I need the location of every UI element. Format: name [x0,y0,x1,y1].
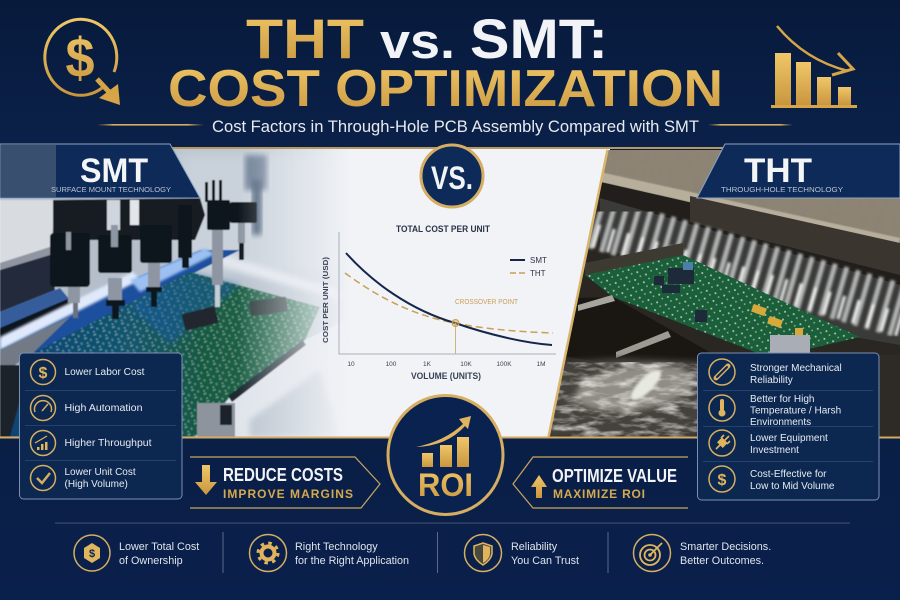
SMT label tab [0,144,200,198]
text: lower equipment investment: Lower Equipment [750,433,828,444]
legend: THT [530,269,546,278]
subtitle: Cost Factors in Through-Hole PCB Assembly Compared with SMT [212,117,699,136]
text: better for high temperature: Temperature / Harsh [750,406,841,416]
center white chart background [0,148,610,438]
footer item: smarter decisions: Better Outcomes. [680,555,764,567]
chart axes [339,232,556,354]
icon: chain link [709,359,735,385]
x tick labels: 10 [347,361,355,368]
THT label tab: THROUGH-HOLE TECHNOLOGY [721,187,843,194]
x tick labels: 1K [423,361,432,368]
footer item: right technology: Right Technology [295,541,378,553]
THT curve [345,273,553,333]
text: lower unit cost: (High Volume) [64,479,128,490]
green through-hole board [585,243,683,276]
title: COST OPTIMIZATION [168,60,723,118]
icon: dollar: $ [718,472,727,489]
title: THT [246,7,364,70]
footer item: reliability: You Can Trust [511,555,579,567]
footer item: total cost: Lower Total Cost [119,541,199,553]
VS badge: VS. [431,160,473,196]
callout: reduce costs [190,457,380,508]
text: lower labor cost: Lower Labor Cost [64,367,145,378]
callout: optimize value [513,457,688,508]
callout: reduce costs: IMPROVE MARGINS [223,487,353,501]
icon: check [30,466,56,490]
text: cost-effective: Low to Mid Volume [750,481,835,492]
footer separators [223,532,608,573]
x tick labels: 1M [536,361,546,368]
text: stronger mechanical reliability: Reliability [750,375,793,386]
VS badge [421,145,483,207]
footer item: right technology [250,534,409,572]
photo: SMT pick-and-place machine [0,148,350,438]
icon: dollar: $ [39,365,48,382]
SMT curve [346,253,552,345]
footer item: total cost: $ [89,548,95,560]
chart title: TOTAL COST PER UNIT [396,224,490,234]
footer background [0,438,900,600]
title [168,7,723,118]
icon: dollar [30,360,56,384]
x tick labels: 100K [496,361,512,368]
text: high automation: High Automation [64,403,142,414]
icon: down arrow [195,465,217,495]
x tick labels: 10K [460,361,472,368]
legend [510,256,547,278]
crossover marker [452,297,518,354]
icon: dollar [709,466,735,492]
text: better for high temperature: Better for High [750,394,814,405]
icon: up arrow [531,475,547,498]
SMT label tab: SURFACE MOUNT TECHNOLOGY [51,187,171,194]
title: SMT: [470,7,608,70]
x tick labels [347,361,546,368]
footer item: total cost [74,535,199,571]
solder wave [550,354,697,436]
machine rail [0,200,57,263]
footer item: total cost: of Ownership [119,555,183,567]
footer item: reliability: Reliability [511,541,558,553]
x axis label: VOLUME (UNITS) [411,371,481,381]
chart: total cost per unit [321,224,556,381]
SMT label tab: SMT [80,152,148,190]
photo: THT wave soldering [540,148,900,438]
ROI badge [388,396,503,514]
panel: SMT benefits [20,353,182,499]
callout: optimize value: MAXIMIZE ROI [553,487,645,501]
y axis label: COST PER UNIT (USD) [321,256,330,343]
x tick labels: 100 [386,361,397,368]
gantry [53,198,205,240]
icon: thermometer [709,395,735,421]
header background [0,0,900,148]
footer divider [55,522,850,524]
icon: declining bars with arrow [771,26,857,108]
text: cost-effective: Cost-Effective for [750,469,827,480]
ROI badge: ROI [418,467,473,503]
icon: rising chart [30,430,56,456]
icon: plug [709,430,735,456]
legend: SMT [530,256,547,265]
circuit board [10,272,320,437]
text: stronger mechanical reliability: Stronger Mechanical [750,363,842,374]
text: better for high temperature: Environments [750,417,811,428]
title: vs. [380,15,455,69]
text: higher throughput: Higher Throughput [64,438,152,449]
metal rail bottom [194,330,328,436]
callout: optimize value: OPTIMIZE VALUE [552,466,677,486]
gold rule under header [0,147,900,149]
icon: dollar with down arrow [45,19,120,105]
callout: reduce costs: REDUCE COSTS [223,465,343,485]
footer item: right technology: for the Right Application [295,555,409,567]
panel: THT benefits [698,353,879,500]
crossover marker: CROSSOVER POINT [455,297,518,306]
THT label tab [697,144,900,198]
icon: gauge [30,396,56,420]
molten solder waterfall [600,198,900,345]
footer item: reliability [464,534,579,572]
slanted gold edge [548,150,608,437]
text: lower unit cost: Lower Unit Cost [64,467,136,478]
under-board machinery [566,297,710,361]
footer item: smarter decisions [634,534,771,572]
text: lower equipment investment: Investment [750,445,799,456]
icon: dollar with down arrow: $ [66,26,94,89]
THT label tab: THT [744,152,812,190]
footer item: smarter decisions: Smarter Decisions. [680,541,771,553]
